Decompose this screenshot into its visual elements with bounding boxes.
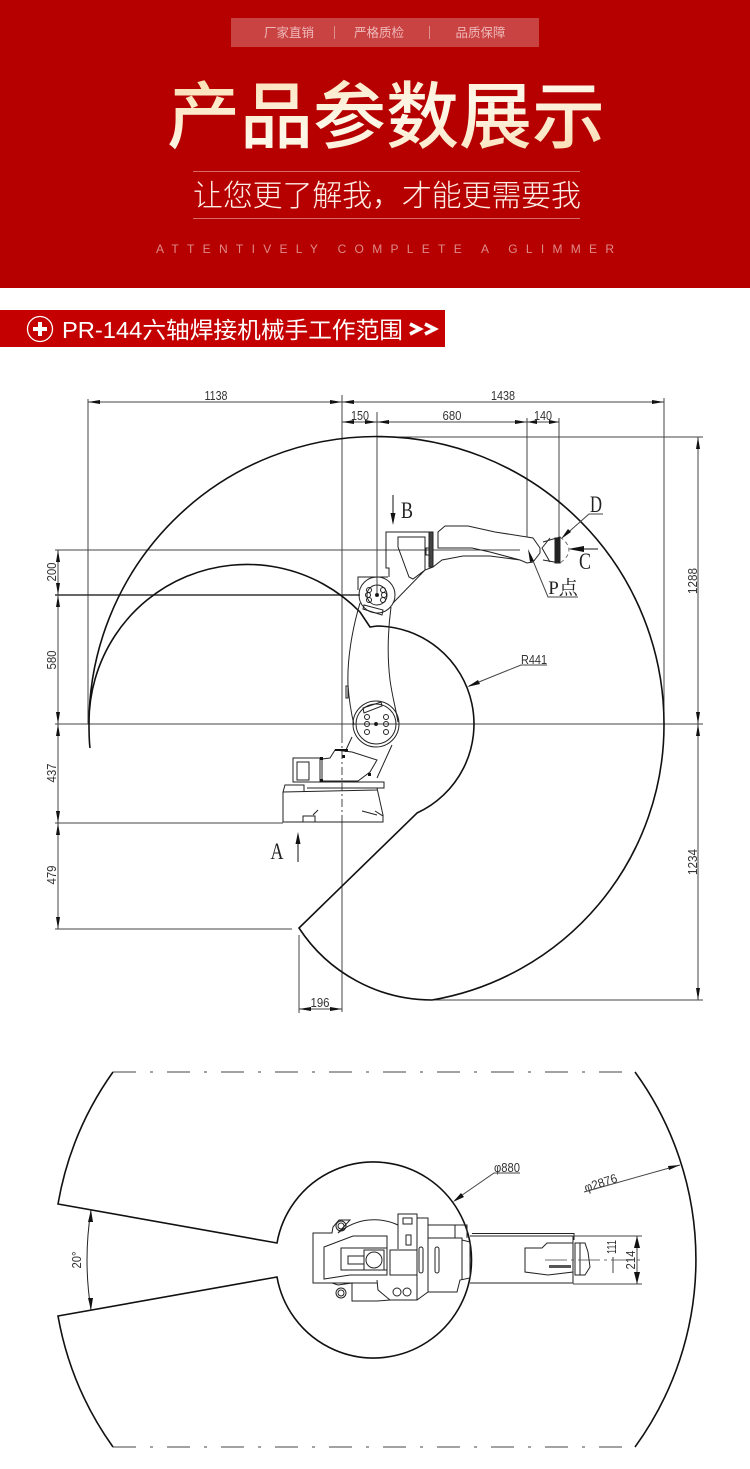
angle dimension 20 degrees: 20°	[70, 1252, 84, 1268]
callout: arrow C	[568, 546, 598, 574]
dimension labels: 150	[351, 409, 369, 423]
dimension: 111 and 214	[573, 1236, 642, 1284]
angle dimension 20 degrees	[70, 1210, 93, 1310]
callout: leader P point	[528, 549, 579, 599]
tag bar: product promises: 品质保障	[455, 25, 506, 40]
dimension: 111 and 214: 214	[624, 1250, 638, 1270]
base centre line	[341, 735, 343, 820]
elbow housing	[386, 532, 433, 603]
title: 产品参数展示	[167, 77, 605, 158]
dimension labels: 580	[45, 650, 59, 670]
tag bar: product promises: 厂家直销	[264, 25, 314, 40]
dimension arrowheads	[56, 400, 700, 1011]
callout: diameter 2876	[582, 1165, 680, 1195]
callouts A B C D P R441	[270, 492, 603, 864]
chart: top view working range	[58, 1072, 696, 1447]
base hatch and bolts	[320, 749, 371, 782]
callout: arrow A	[270, 832, 300, 864]
icon: plus in circle	[28, 316, 52, 342]
dimension labels: 1288	[686, 568, 700, 594]
tag bar: product promises	[231, 18, 539, 47]
robot base	[283, 737, 392, 822]
callout: leader D: D	[590, 492, 602, 517]
callout: leader R441	[467, 653, 547, 687]
dimension labels: 437	[45, 763, 59, 782]
callout: leader P point: P点	[548, 577, 579, 599]
dimension labels: 200	[45, 562, 59, 582]
dimension labels: 1234	[686, 849, 700, 875]
English tagline: ATTENTIVELY COMPLETE A GLIMMER	[156, 242, 614, 256]
dimension labels: 196	[310, 996, 330, 1010]
callout: arrow C: C	[579, 549, 591, 574]
dimension labels: 479	[45, 865, 59, 884]
callout: diameter 880: φ880	[494, 1161, 520, 1175]
forearm and wrist	[470, 1234, 590, 1283]
dimension labels: 1438	[491, 389, 515, 403]
icon: double chevrons	[410, 324, 435, 334]
callout: arrow B: B	[401, 498, 413, 523]
working envelope outline	[89, 437, 664, 1000]
dimension: 111 and 214: 111	[605, 1240, 619, 1254]
panel: red header banner	[0, 0, 750, 288]
forearm	[433, 526, 540, 567]
callout: leader D	[561, 492, 603, 539]
lower arm	[346, 603, 398, 725]
callout: diameter 880	[453, 1161, 520, 1202]
chart: side view working range	[45, 389, 703, 1013]
dimension labels: 140	[534, 409, 552, 423]
section heading band	[0, 310, 445, 347]
dimension lines	[55, 395, 703, 1013]
tag bar: product promises: 严格质检	[354, 25, 404, 40]
callout: leader R441: R441	[521, 653, 547, 667]
callout: diameter 2876: φ2876	[582, 1171, 619, 1195]
centre line	[545, 1259, 640, 1261]
upper joint	[358, 577, 395, 613]
wrist flange	[542, 537, 569, 563]
base and turret	[313, 1214, 470, 1301]
callout: arrow B	[390, 495, 413, 525]
mounting holes and motor circles	[336, 1218, 439, 1298]
lower joint	[353, 701, 399, 747]
robot arm side view	[283, 526, 569, 822]
dash-dot top and bottom edges	[113, 1072, 635, 1447]
callout: arrow A: A	[270, 839, 284, 864]
elbow dark band	[429, 532, 433, 567]
dimension labels	[45, 389, 700, 1010]
subtitle with rules: 让您更了解我，才能更需要我	[193, 180, 581, 213]
envelope outline	[58, 1072, 696, 1447]
dimension labels: 1138	[204, 389, 228, 403]
heading text: PR-144六轴焊接机械手工作范围	[62, 317, 403, 343]
robot top view	[313, 1214, 640, 1301]
dimension labels: 680	[442, 409, 462, 423]
